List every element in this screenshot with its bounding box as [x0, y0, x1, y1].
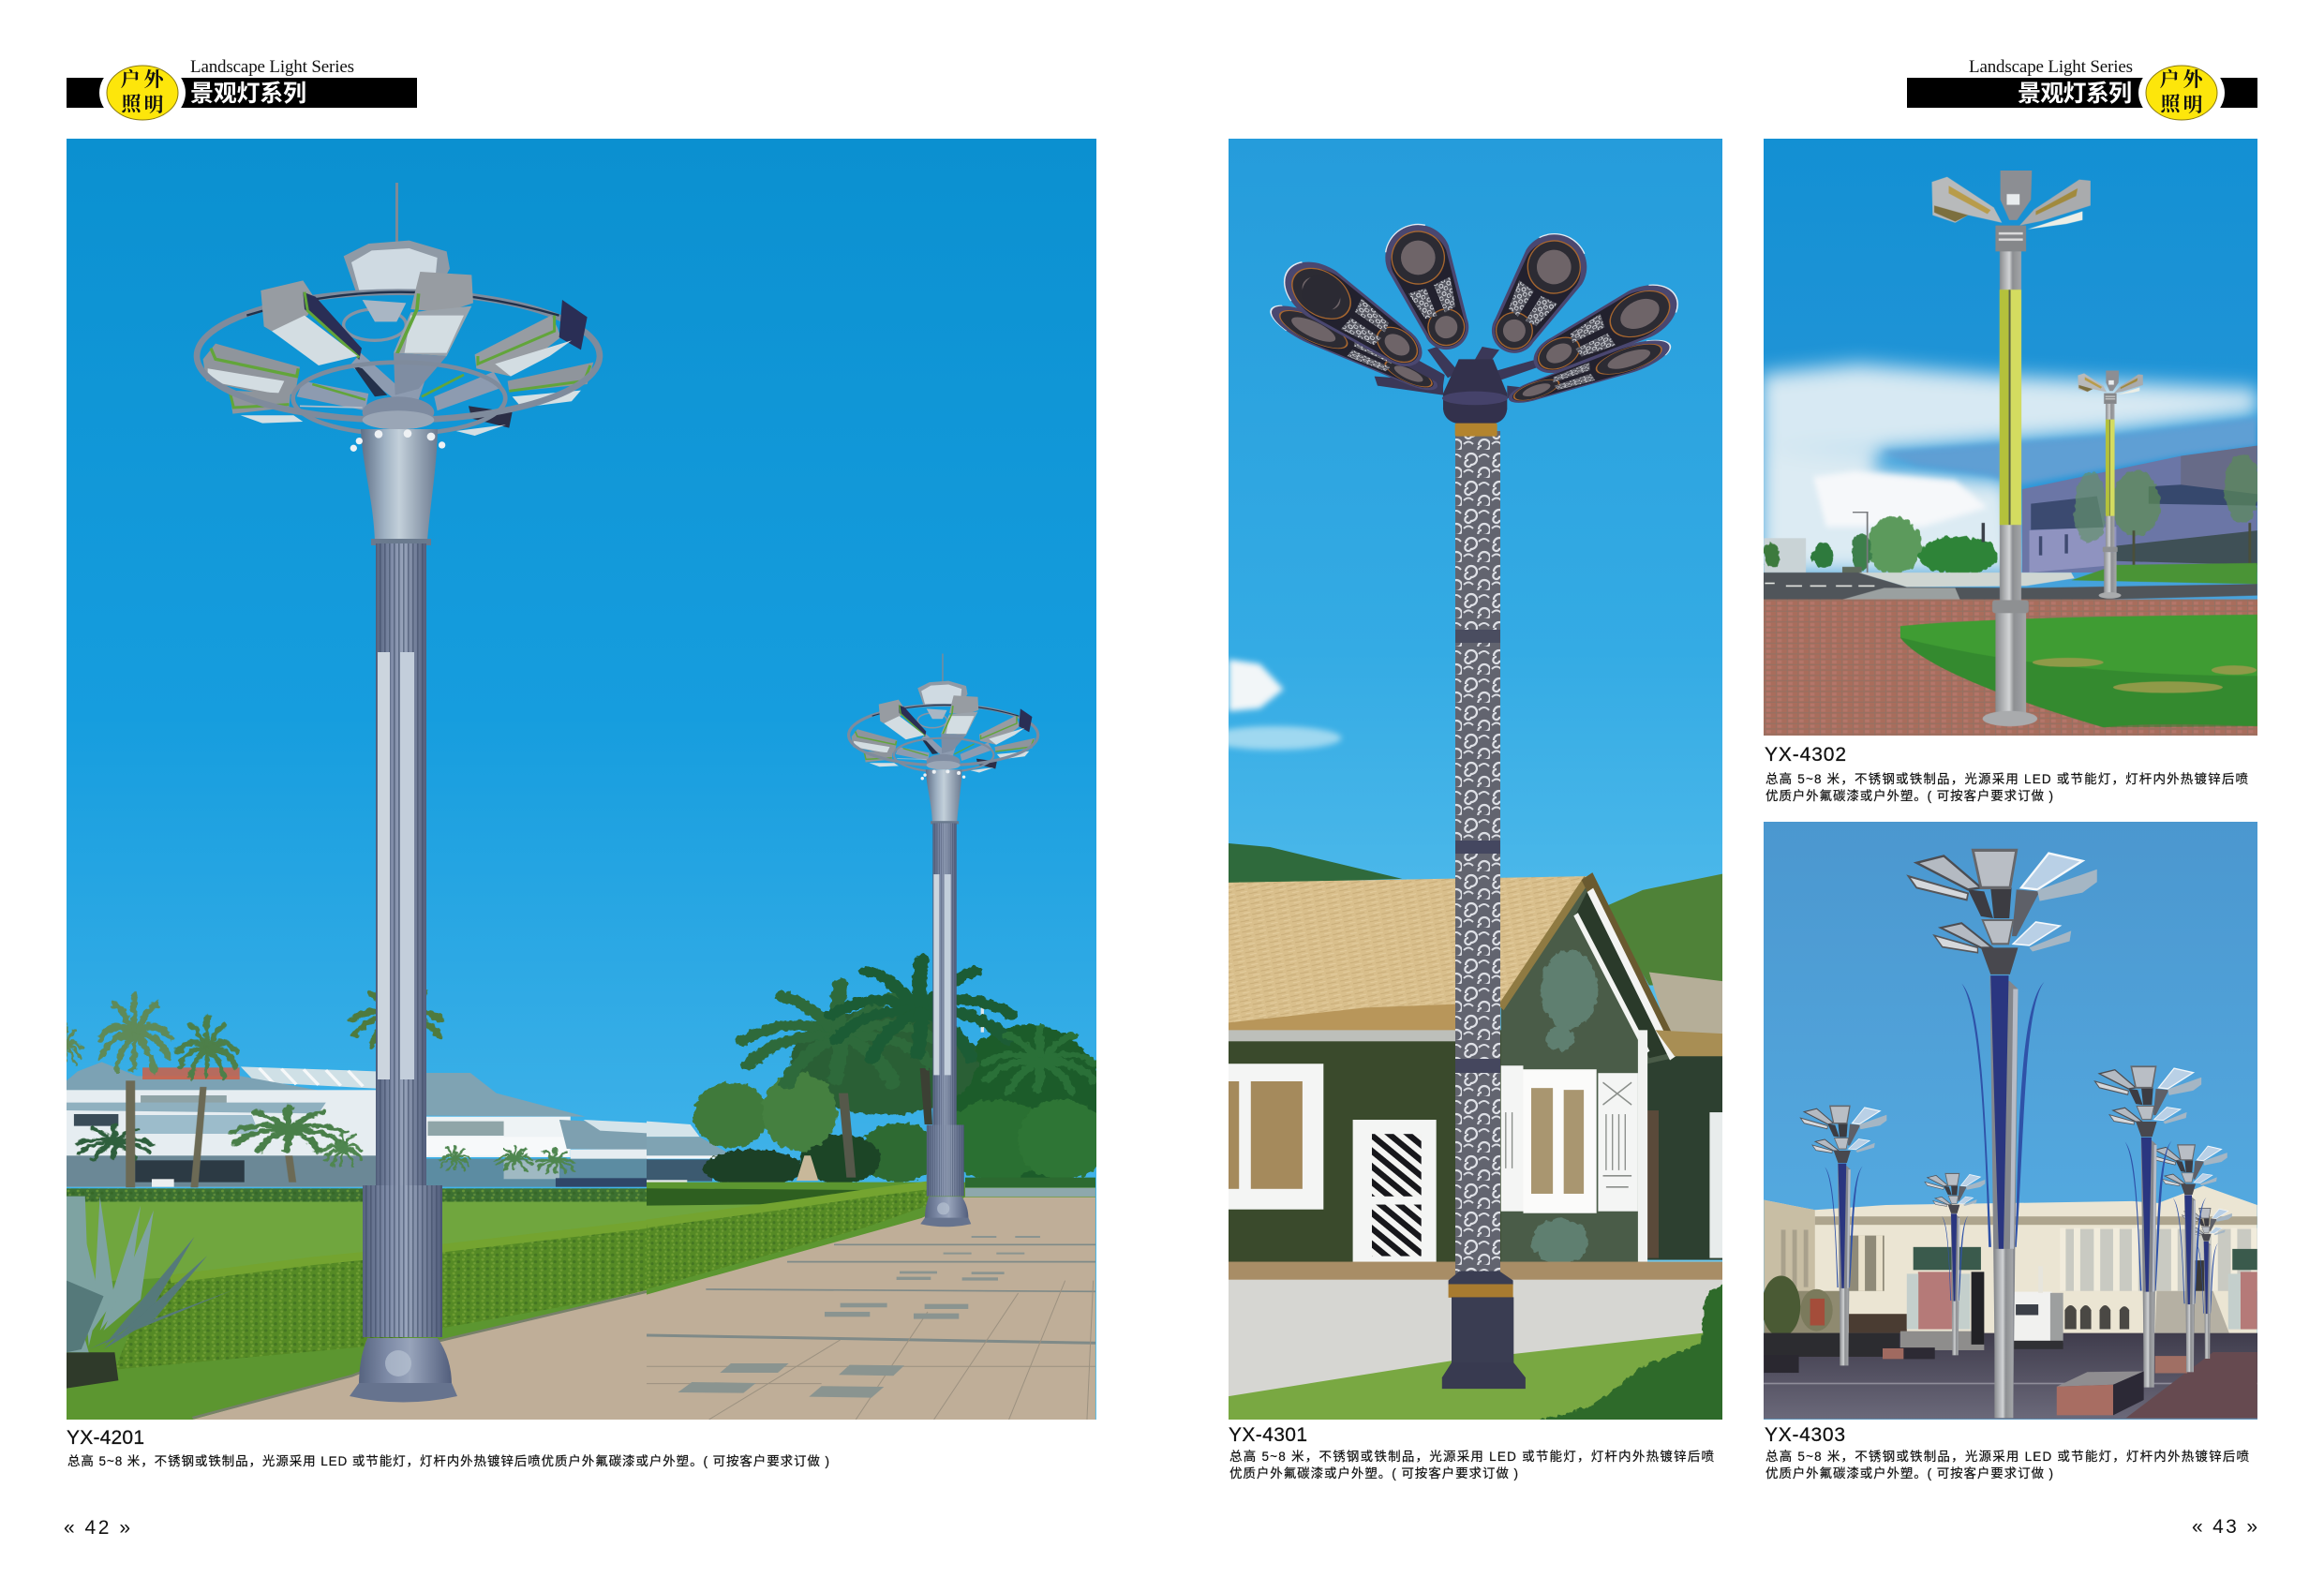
- far lamp YX-4302: [2078, 371, 2143, 599]
- lamp head YX-4301: [1265, 215, 1687, 437]
- palms and right ground: [647, 959, 1106, 1420]
- caption: YX-4301: 总高 5~8 米，不锈钢或铁制品，光源采用 LED 或节能灯，灯杆内外热镀锌后喷: [1229, 1449, 1715, 1464]
- page number 43: « 43 »: [2192, 1516, 2257, 1538]
- building: [2022, 446, 2257, 573]
- caption: YX-4302: 总高 5~8 米，不锈钢或铁制品，光源采用 LED 或节能灯，灯杆内外热镀锌后喷: [1765, 771, 2249, 786]
- lamp pole YX-4301: [1442, 431, 1526, 1389]
- resort building and left ground: [52, 987, 648, 1421]
- caption: YX-4201: [67, 1427, 829, 1468]
- page number 42: « 42 »: [64, 1517, 130, 1539]
- caption: YX-4302: [1765, 744, 2249, 803]
- small lamps YX-4303: [1800, 1066, 2232, 1388]
- caption: YX-4303: [1765, 1424, 2249, 1480]
- main lamp YX-4302: [1932, 171, 2091, 726]
- caption: YX-4303: 优质户外氟碳漆或户外塑。( 可按客户要求订做 ): [1765, 1465, 2053, 1480]
- left page header: 户: [120, 65, 141, 93]
- panel: YX-4301 photo: [1208, 139, 1725, 1429]
- brick paving and lawn: [1762, 600, 2258, 736]
- panel: YX-4302 photo: [1762, 139, 2259, 736]
- right page header: [1907, 57, 2257, 126]
- caption: YX-4301: YX-4301: [1229, 1424, 1307, 1446]
- plaza: [1762, 1333, 2258, 1419]
- main lamp YX-4201: [197, 183, 600, 1402]
- bench: [2057, 1371, 2144, 1415]
- left page header: 明: [144, 90, 163, 118]
- panel: YX-4201 photo: [52, 139, 1106, 1421]
- left page header: Landscape Light Series: [190, 57, 354, 77]
- right page header: Landscape Light Series: [1969, 57, 2133, 77]
- far lamp YX-4201: [849, 654, 1038, 1227]
- left page header: 外: [144, 65, 165, 93]
- main lamp YX-4303: [1909, 850, 2097, 1418]
- right page header: 照: [2161, 89, 2182, 117]
- right page header: 户: [2159, 65, 2180, 93]
- caption: YX-4301: [1229, 1424, 1715, 1480]
- caption: YX-4301: 优质户外氟碳漆或户外塑。( 可按客户要求订做 ): [1229, 1465, 1518, 1480]
- truck: [2013, 1266, 2063, 1349]
- caption: YX-4201: YX-4201: [67, 1427, 144, 1449]
- pavilions: [1907, 1247, 2257, 1345]
- left page header: 景观灯系列: [190, 81, 306, 107]
- left page header: [67, 57, 417, 126]
- left page header: 照: [122, 89, 142, 117]
- cloud: [1208, 660, 1341, 750]
- caption: YX-4303: 总高 5~8 米，不锈钢或铁制品，光源采用 LED 或节能灯，灯杆内外热镀锌后喷: [1765, 1449, 2249, 1464]
- caption: YX-4302: YX-4302: [1765, 744, 1846, 766]
- right page header: 外: [2183, 65, 2204, 93]
- panel: YX-4303 photo: [1762, 822, 2258, 1420]
- house and landscape: [1229, 843, 1725, 1429]
- caption: YX-4201: 总高 5~8 米，不锈钢或铁制品，光源采用 LED 或节能灯，灯杆内外热镀锌后喷优质户外氟碳漆或户外塑。( 可按客户要求订做 ): [67, 1453, 829, 1468]
- caption: YX-4302: 优质户外氟碳漆或户外塑。( 可按客户要求订做 ): [1765, 788, 2053, 803]
- right page header: 景观灯系列: [2018, 81, 2132, 107]
- capitol building: [1764, 1186, 2257, 1335]
- right page header: 明: [2183, 90, 2202, 118]
- caption: YX-4303: YX-4303: [1765, 1424, 1845, 1446]
